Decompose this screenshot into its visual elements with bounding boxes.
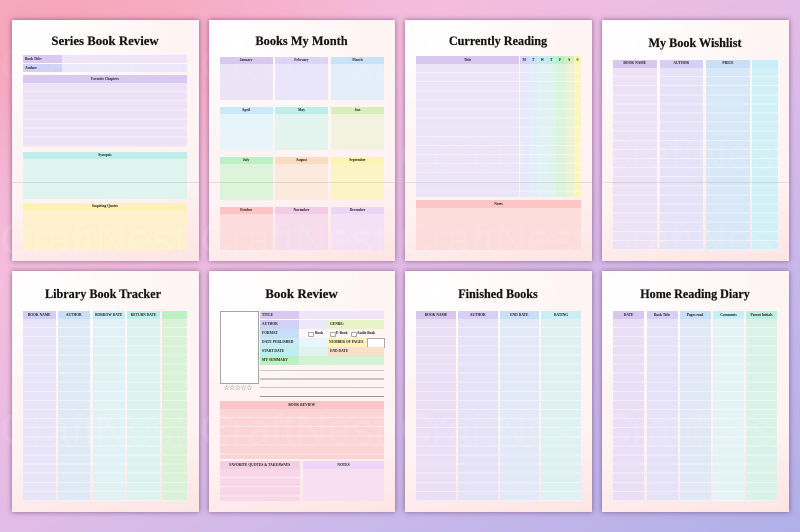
- column: author: AUTHOR: [673, 61, 689, 65]
- section: notes: Notes: [494, 202, 503, 206]
- section: favorite chapters: Favorite Chapters: [91, 77, 119, 81]
- form row: author: [23, 64, 187, 72]
- column: author: [58, 311, 90, 501]
- watermarks: CraftNest: [0, 40, 186, 89]
- column: date: [613, 311, 644, 501]
- summary lines: [260, 370, 384, 397]
- panel: currently reading: [405, 20, 592, 260]
- month: july: [220, 157, 273, 200]
- column: comments: [713, 311, 744, 501]
- title: my book wishlist: My Book Wishlist: [648, 36, 742, 50]
- column: tuesday: T: [532, 58, 534, 62]
- month: november: November: [294, 208, 309, 212]
- column: book name: BOOK NAME: [425, 313, 447, 317]
- form row: date published and number of pages: NUMBER OF PAGES: [329, 340, 363, 344]
- watermarks: CraftNest: [0, 215, 186, 264]
- section: inspiring quotes: Inspiring Quotes: [92, 204, 118, 208]
- month: october: October: [240, 208, 252, 212]
- form row: my summary: MY SUMMARY: [262, 358, 288, 362]
- month: february: [275, 57, 328, 100]
- form row: start and end date: START DATE: [262, 349, 284, 353]
- column: title: [416, 56, 519, 197]
- form row: my summary: [260, 356, 384, 364]
- form row: start and end date: [260, 347, 384, 356]
- column: book name: BOOK NAME: [623, 61, 646, 65]
- column: return date: [127, 311, 160, 501]
- column: end date: END DATE: [510, 313, 528, 317]
- month: june: [331, 107, 384, 150]
- column: blank: [752, 60, 778, 250]
- column: book name: [613, 60, 657, 250]
- month: may: [275, 107, 328, 150]
- form row: title: TITLE: [262, 313, 273, 317]
- section: notes: [303, 461, 384, 501]
- column: price: PRICE: [722, 61, 734, 65]
- section: notes: [416, 200, 581, 250]
- title: currently reading: Currently Reading: [449, 34, 547, 48]
- month: may: May: [298, 108, 305, 112]
- title: series book review: Series Book Review: [51, 34, 159, 48]
- column: book name: [416, 311, 456, 501]
- title: home reading diary: Home Reading Diary: [640, 287, 750, 301]
- column: thursday: [547, 56, 556, 197]
- month: september: September: [349, 158, 366, 162]
- section: notes: NOTES: [337, 463, 350, 467]
- column: parent initials: [746, 311, 777, 501]
- column: friday: [556, 56, 565, 197]
- column: book name: BOOK NAME: [28, 313, 51, 317]
- column: rating: [541, 311, 581, 501]
- watermarks: CraftNest: [0, 405, 186, 454]
- section: favorite chapters: [23, 75, 187, 147]
- column: end date: [500, 311, 539, 501]
- title: books my month: Books My Month: [255, 34, 348, 48]
- column: rating: RATING: [554, 313, 568, 317]
- column: borrow date: [93, 311, 125, 501]
- section: book review: [220, 401, 384, 459]
- column: price: [706, 60, 750, 250]
- month: december: [331, 207, 384, 250]
- month: march: [331, 57, 384, 100]
- month: june: Jun: [355, 108, 360, 112]
- form row: book title: [23, 55, 187, 63]
- month: october: [220, 207, 273, 250]
- section: favorite quotes and takeaways: [220, 461, 300, 501]
- panel: home reading diary: [602, 271, 788, 512]
- column: wednesday: W: [540, 58, 544, 62]
- panel: my book wishlist: [602, 20, 788, 260]
- section: book review: BOOK REVIEW: [288, 402, 315, 406]
- column: return date: RETURN DATE: [131, 313, 156, 317]
- watermarks: CraftNest: [600, 215, 786, 264]
- watermarks: CraftNest: [200, 405, 386, 454]
- form row: format: Audio Book: [357, 331, 375, 335]
- column: pages read: Pages read: [687, 313, 703, 317]
- column: thursday: T: [550, 58, 552, 62]
- form row: date published and number of pages: [260, 338, 384, 346]
- form row: author and genre: AUTHOR: [262, 322, 278, 326]
- month: january: [220, 57, 273, 100]
- title: library book tracker: Library Book Tracker: [45, 287, 161, 301]
- watermarks: CraftNest: [200, 215, 386, 264]
- column: book title: [646, 311, 678, 501]
- column: pages read: [680, 311, 710, 501]
- month: february: February: [294, 58, 309, 62]
- form row: book title: Book Title:: [25, 57, 42, 61]
- column: date: DATE: [624, 313, 633, 317]
- watermarks: CraftNest: [400, 405, 586, 454]
- column: parent initials: Parent Initials: [750, 313, 772, 317]
- watermarks: CraftNest: [400, 130, 586, 179]
- column: tuesday: [529, 56, 538, 197]
- form row: author and genre: GENRE:: [330, 322, 344, 326]
- form row: format: Book: [315, 331, 323, 335]
- month: march: March: [352, 58, 363, 62]
- month: april: April: [242, 108, 250, 112]
- panel: series book review: [12, 20, 198, 260]
- month: july: July: [243, 158, 249, 162]
- month: april: [220, 107, 273, 150]
- panel: book review: [208, 271, 395, 512]
- form row: format: [260, 329, 375, 338]
- panel: finished books: [405, 271, 592, 512]
- column: wednesday: [538, 56, 547, 197]
- title: finished books: Finished Books: [458, 287, 538, 301]
- title: book review: Book Review: [265, 286, 338, 301]
- form row: start and end date: END DATE: [330, 349, 348, 353]
- column: monday: M: [523, 58, 526, 62]
- month: august: [275, 157, 328, 200]
- panel: library book tracker: [12, 271, 198, 512]
- column: author: [660, 60, 703, 250]
- column: saturday: [565, 56, 574, 197]
- watermarks: CraftNest: [200, 40, 386, 89]
- watermarks: CraftNest: [600, 405, 786, 454]
- month: september: [331, 157, 384, 200]
- column: monday: [520, 56, 529, 197]
- form row: author: Author:: [25, 66, 37, 70]
- month: january: January: [240, 58, 252, 62]
- column: blank: [162, 311, 187, 501]
- cover photo box: [220, 311, 258, 384]
- section: inspiring quotes: [23, 203, 187, 250]
- month: november: [275, 207, 328, 250]
- form row: format: E-Book: [336, 331, 348, 335]
- watermarks: CraftNest: [400, 215, 586, 264]
- column: comments: Comments: [720, 313, 737, 317]
- form row: date published and number of pages: DATE PUBLISHED: [262, 340, 293, 344]
- form row: title: [260, 311, 384, 319]
- column: borrow date: BORROW DATE: [95, 313, 122, 317]
- icon: rating stars: ☆☆☆☆☆: [224, 384, 252, 392]
- column: sunday: S: [576, 58, 578, 62]
- column: book title: Book Title: [654, 313, 670, 317]
- section: synopsis: [23, 152, 187, 199]
- column: book name: [23, 311, 56, 501]
- section: synopsis: Synopsis: [98, 153, 112, 157]
- month: december: December: [350, 208, 365, 212]
- column: author: AUTHOR: [470, 313, 486, 317]
- month: august: August: [296, 158, 307, 162]
- form row: format: FORMAT: [262, 331, 278, 335]
- section: favorite quotes and takeaways: FAVORITE QUOTES & TAKEAWAYS: [229, 463, 290, 467]
- column: sunday: [574, 56, 581, 197]
- column: author: AUTHOR: [66, 313, 82, 317]
- column: title: Title: [464, 58, 471, 62]
- form row: author and genre: [260, 320, 384, 328]
- panel: books my month: [208, 20, 395, 260]
- watermarks: CraftNest: [600, 130, 786, 179]
- column: saturday: S: [568, 58, 570, 62]
- column: friday: F: [559, 58, 561, 62]
- column: author: [458, 311, 498, 501]
